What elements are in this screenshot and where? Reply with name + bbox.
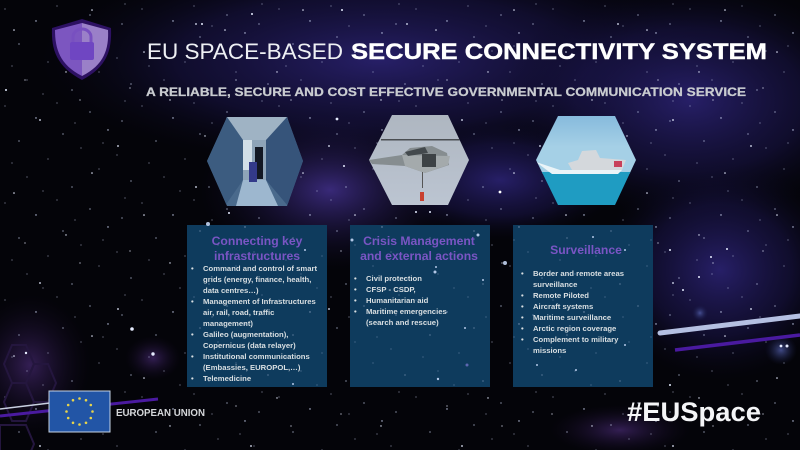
image: patrol boat hexagon	[534, 114, 638, 207]
title: SECURE CONNECTIVITY SYSTEM	[351, 39, 767, 64]
panel heading: crisis management: Crisis Management	[363, 234, 475, 248]
purple streak, lower left	[0, 399, 158, 416]
bullet list: connecting key infrastructures: •	[191, 374, 194, 383]
bullet list: surveillance: Aircraft systems	[533, 302, 593, 311]
panel: crisis management	[350, 225, 490, 387]
bullet list: surveillance: •	[521, 335, 524, 344]
bullet list: connecting key infrastructures: •	[191, 297, 194, 306]
bullet list: connecting key infrastructures: Telemedicine	[203, 374, 252, 383]
bullet list: crisis management: Humanitarian aid	[366, 296, 429, 305]
panel: connecting key infrastructures	[187, 225, 327, 387]
bullet list: connecting key infrastructures: (Embassies, EUROPOL,…)	[203, 363, 301, 372]
bullet list: crisis management	[354, 274, 447, 327]
bullet list: connecting key infrastructures: •	[191, 264, 194, 273]
bullet list: crisis management: CFSP - CSDP,	[366, 285, 416, 294]
bullet list: surveillance: missions	[533, 346, 566, 355]
bullet list: connecting key infrastructures: •	[191, 352, 194, 361]
decorative hexagon grid, lower left	[0, 345, 56, 450]
subtitle: A RELIABLE, SECURE AND COST EFFECTIVE GOVERNMENTAL COMMUNICATION SERVICE	[146, 85, 746, 99]
panel heading: crisis management	[360, 234, 478, 263]
title: EU SPACE-BASED	[147, 39, 343, 64]
bullet list: surveillance: •	[521, 324, 524, 333]
bullet list: surveillance: •	[521, 302, 524, 311]
bullet list: connecting key infrastructures: Galileo (augmentation),	[203, 330, 288, 339]
panel heading: crisis management: and external actions	[360, 249, 478, 263]
panel heading: connecting key infrastructures: Connecting key	[212, 234, 303, 248]
purple streak, lower right	[675, 335, 800, 350]
bullet list: surveillance: Arctic region coverage	[533, 324, 617, 333]
light streak, lower right	[660, 316, 800, 333]
bullet list: crisis management: •	[354, 285, 357, 294]
panel stars overlay	[206, 222, 626, 385]
bullet list: connecting key infrastructures: grids (energy, finance, health,	[203, 275, 311, 284]
bullet list: connecting key infrastructures	[191, 264, 317, 383]
bullet list: surveillance: Complement to military	[533, 335, 619, 344]
bullet list: connecting key infrastructures: •	[191, 330, 194, 339]
bullet list: surveillance: Maritime surveillance	[533, 313, 612, 322]
bullet list: surveillance: •	[521, 269, 524, 278]
bullet list: surveillance: Border and remote areas	[533, 269, 624, 278]
panel heading: surveillance: Surveillance	[550, 243, 622, 257]
image: helicopter rescue hexagon	[369, 115, 469, 205]
icon: shield with padlock	[52, 19, 111, 80]
bullet list: crisis management: •	[354, 274, 357, 283]
bullet list: crisis management: (search and rescue)	[366, 318, 439, 327]
bullet list: connecting key infrastructures: Management of Infrastructures	[203, 297, 316, 306]
bullet list: surveillance: surveillance	[533, 280, 578, 289]
light streak, lower left	[0, 403, 50, 409]
bullet list: connecting key infrastructures: management)	[203, 319, 253, 328]
bullet list: surveillance: Remote Piloted	[533, 291, 589, 300]
bullet list: crisis management: Maritime emergencies	[366, 307, 447, 316]
bullet list: connecting key infrastructures: Institutional communications	[203, 352, 310, 361]
bullet list: connecting key infrastructures: Command and control of smart	[203, 264, 317, 273]
bullet list: surveillance	[521, 269, 624, 355]
bullet list: surveillance: •	[521, 291, 524, 300]
bullet list: crisis management: •	[354, 296, 357, 305]
panel heading: connecting key infrastructures: infrastructures	[214, 249, 300, 263]
image: data centre corridor hexagon	[205, 115, 305, 208]
title	[147, 39, 767, 64]
panel heading: connecting key infrastructures	[212, 234, 303, 263]
bullet list: surveillance: •	[521, 313, 524, 322]
bullet list: connecting key infrastructures: Copernicus (data relayer)	[203, 341, 296, 350]
panel: surveillance	[513, 225, 653, 387]
hashtag: #EUSpace	[627, 397, 761, 427]
bullet list: connecting key infrastructures: air, rail, road, traffic	[203, 308, 275, 317]
EU flag	[49, 391, 110, 432]
label: European Union: EUROPEAN UNION	[116, 408, 205, 419]
bullet list: crisis management: Civil protection	[366, 274, 422, 283]
bullet list: connecting key infrastructures: data centres…)	[203, 286, 259, 295]
bullet list: crisis management: •	[354, 307, 357, 316]
